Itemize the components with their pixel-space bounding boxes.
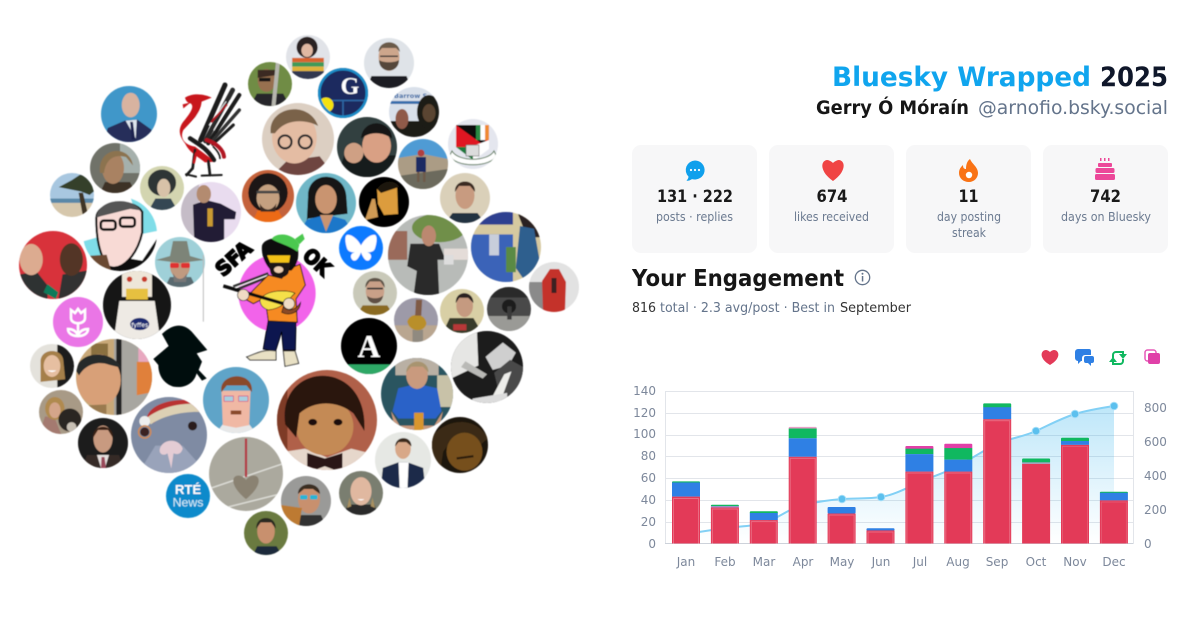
left axis labels: 140 bbox=[633, 384, 656, 398]
avatar: man in dark shirt bbox=[440, 289, 484, 333]
avatar: man in blue with beer bbox=[381, 358, 453, 430]
month labels: Dec bbox=[1102, 555, 1126, 569]
left axis labels: 20 bbox=[641, 515, 656, 529]
avatar: boy with bow tie bbox=[276, 369, 378, 470]
month labels bbox=[676, 555, 1126, 569]
bar: Jul bbox=[905, 446, 933, 545]
avatar: man in hat with red sunglasses bbox=[155, 237, 205, 287]
bar: Jun bbox=[866, 528, 894, 545]
engagement chart bbox=[633, 384, 1167, 569]
avatar: woman on teal bbox=[296, 173, 356, 233]
left axis labels: 60 bbox=[641, 471, 656, 485]
stat card: posts and replies: 131 · 222 bbox=[657, 187, 733, 207]
right axis labels: 0 bbox=[1144, 537, 1152, 551]
illustration: Liverpool liver bird bbox=[180, 85, 239, 177]
stacked bars bbox=[672, 403, 1128, 545]
avatar: man with chain bbox=[248, 62, 292, 106]
avatar: man with glasses large bbox=[262, 103, 334, 175]
icon: heart bbox=[822, 160, 844, 181]
avatar: man on olive background bbox=[244, 511, 288, 555]
right axis labels: 600 bbox=[1144, 435, 1167, 449]
user name and handle: Gerry Ó Móraín bbox=[816, 95, 969, 119]
engagement summary: 816 bbox=[632, 300, 656, 316]
month labels: Jun bbox=[871, 555, 890, 569]
engagement summary bbox=[632, 300, 911, 316]
left axis labels: 40 bbox=[641, 493, 656, 507]
avatar: pigeon in Santa hat bbox=[131, 397, 207, 473]
avatar: Bluesky butterfly bbox=[339, 226, 383, 270]
avatar: Barrow St selfie: Barrow S bbox=[394, 92, 427, 100]
left axis labels: 100 bbox=[633, 427, 656, 441]
bar: Oct bbox=[1022, 458, 1050, 544]
bar: Nov bbox=[1061, 438, 1089, 544]
avatar: man writing, black and white bbox=[451, 331, 523, 403]
stat card: days on Bluesky: days on Bluesky bbox=[1061, 210, 1151, 224]
avatar: man with short hair bbox=[440, 173, 490, 223]
avatar: interview on red backdrop bbox=[19, 231, 87, 299]
avatar: hanging heart ornament bbox=[209, 437, 283, 511]
bar: Jan bbox=[672, 481, 700, 544]
avatar: man in turtleneck bbox=[353, 271, 397, 315]
stat card: posts and replies bbox=[632, 145, 757, 253]
avatar: bearded man bbox=[364, 38, 414, 88]
left axis labels: 80 bbox=[641, 449, 656, 463]
avatar: man with blue sunglasses and pint bbox=[281, 476, 331, 526]
avatar: RTÉ News: News bbox=[173, 496, 203, 510]
bar: Feb bbox=[711, 505, 739, 545]
avatar: palm tree bbox=[50, 173, 95, 217]
left axis labels: 0 bbox=[648, 537, 656, 551]
title: 2025 bbox=[1100, 62, 1168, 93]
bar: Mar bbox=[750, 511, 778, 545]
avatar: woman with dark curly hair bbox=[140, 166, 184, 210]
avatar: monochrome gateway bbox=[487, 287, 531, 331]
right axis labels: 200 bbox=[1144, 503, 1167, 517]
avatar: cartoon man with glasses bbox=[83, 197, 157, 271]
stat card: days on Bluesky: 742 bbox=[1090, 187, 1121, 207]
avatar: The Atlantic: A bbox=[358, 329, 381, 364]
avatar: couple bbox=[337, 117, 397, 177]
user name and handle bbox=[816, 95, 1168, 119]
stat card: streak bbox=[906, 145, 1031, 253]
avatar: tulip icon bbox=[53, 297, 103, 347]
month labels: May bbox=[830, 555, 854, 569]
heading: Your Engagement: Your Engagement bbox=[631, 266, 844, 292]
bar: Aug bbox=[944, 444, 972, 545]
avatar: man with black cap selfie bbox=[76, 339, 152, 415]
engagement summary: September bbox=[840, 300, 911, 316]
icon: flame bbox=[959, 159, 978, 182]
avatar: man in suit bbox=[101, 86, 157, 142]
avatar cluster bbox=[19, 35, 579, 555]
stat card: streak: day posting bbox=[937, 210, 1001, 224]
avatar: The Atlantic bbox=[341, 318, 397, 374]
engagement summary: total · 2.3 avg/post · Best in bbox=[660, 300, 835, 316]
icon: likes bbox=[1042, 350, 1058, 365]
icon: cake bbox=[1095, 158, 1115, 180]
right axis labels bbox=[1144, 401, 1167, 551]
stat card: likes bbox=[769, 145, 894, 253]
stat card: likes: 674 bbox=[816, 187, 848, 207]
avatar: lego pilot: fyffes bbox=[131, 322, 148, 329]
right axis labels: 800 bbox=[1144, 401, 1167, 415]
month labels: Nov bbox=[1063, 555, 1087, 569]
left axis labels: 120 bbox=[633, 406, 656, 420]
avatar: club crest bbox=[448, 119, 498, 169]
user name and handle: @arnofio.bsky.social bbox=[978, 97, 1168, 119]
avatar: sepia face bbox=[432, 417, 488, 473]
icon: replies bbox=[1075, 349, 1094, 366]
month labels: Mar bbox=[753, 555, 775, 569]
illustration: Sherlock silhouette bbox=[153, 326, 207, 387]
avatar: cartoon man with afro bbox=[242, 170, 294, 222]
avatar: photographer on street bbox=[388, 213, 468, 295]
lettering: SFA: SFA bbox=[210, 236, 257, 281]
bar: May bbox=[828, 507, 856, 545]
stat card: streak: streak bbox=[952, 226, 986, 240]
chart grid bbox=[665, 391, 1134, 544]
avatar: man with long hair bbox=[90, 143, 140, 193]
avatar: Barrow St selfie bbox=[389, 87, 441, 137]
bar: Dec bbox=[1100, 492, 1128, 545]
avatar: man in navy blazer bbox=[375, 432, 431, 488]
month labels: Oct bbox=[1026, 555, 1047, 569]
right axis labels: 400 bbox=[1144, 469, 1167, 483]
avatar: red statue bbox=[529, 262, 579, 312]
bar: Apr bbox=[789, 427, 817, 544]
avatar: woman with dog bbox=[39, 390, 83, 434]
chart legend bbox=[1042, 349, 1160, 366]
avatar: man in dark suit with red tie bbox=[78, 418, 128, 468]
icon: info bbox=[855, 270, 870, 285]
month labels: Sep bbox=[986, 555, 1008, 569]
icon: speech bubble bbox=[686, 160, 705, 181]
month labels: Jul bbox=[912, 555, 927, 569]
cumulative area and line bbox=[686, 402, 1118, 544]
stat card: streak: 11 bbox=[958, 187, 978, 207]
left axis labels bbox=[633, 384, 656, 551]
avatar: The Guardian bbox=[318, 68, 368, 118]
title: Bluesky Wrapped bbox=[832, 62, 1091, 93]
avatar: hiker bbox=[398, 139, 448, 189]
month labels: Aug bbox=[946, 555, 970, 569]
avatar: lego pilot bbox=[103, 270, 171, 339]
icon: quotes bbox=[1145, 350, 1160, 364]
avatar: pixel art man bbox=[203, 367, 269, 433]
avatar: smiling bald man bbox=[339, 471, 383, 515]
avatar: RTÉ News: RTÉ bbox=[175, 482, 201, 497]
avatar: scouts shop bbox=[471, 212, 541, 282]
avatar: RTÉ News bbox=[166, 474, 210, 518]
month labels: Jan bbox=[676, 555, 695, 569]
month labels: Apr bbox=[793, 555, 813, 569]
avatar: The Guardian: G bbox=[341, 74, 360, 100]
avatar: golden bird bbox=[394, 298, 438, 342]
stat card: days on Bluesky bbox=[1043, 145, 1168, 253]
lettering: OK: OK bbox=[298, 243, 337, 282]
avatar: stylised portrait bbox=[359, 177, 409, 227]
month labels: Feb bbox=[714, 555, 736, 569]
illustration: SFA OK guitarist bbox=[203, 234, 337, 366]
icon: reposts bbox=[1109, 352, 1127, 364]
bar: Sep bbox=[983, 403, 1011, 545]
stat card: likes: likes received bbox=[794, 210, 869, 224]
avatar: smiling woman bbox=[30, 344, 74, 388]
stat card: posts and replies: posts · replies bbox=[656, 210, 733, 224]
avatar: man with trophy bbox=[181, 182, 241, 242]
avatar: woman in rainbow jumper bbox=[286, 35, 330, 79]
